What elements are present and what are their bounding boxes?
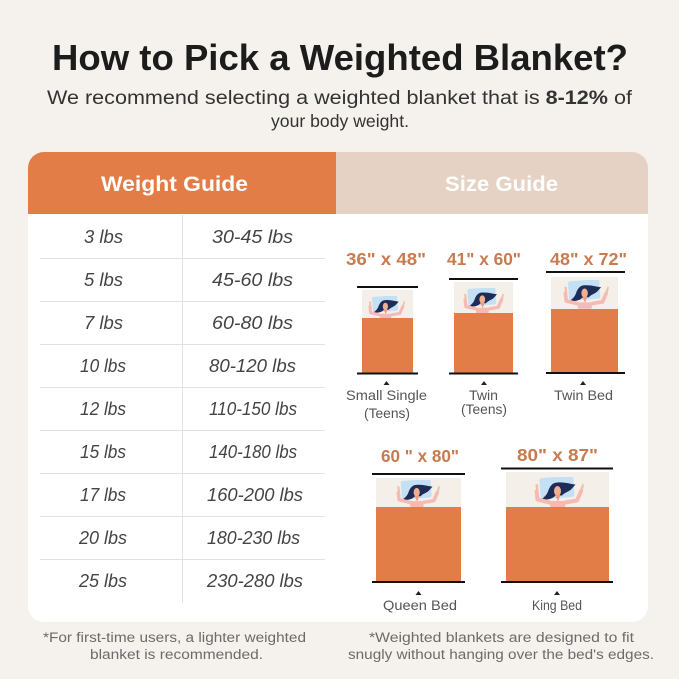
row: 7 lbs bbox=[84, 313, 293, 333]
row: 25 lbs: 230-280 lbs bbox=[206, 571, 303, 591]
panel: guide card bbox=[28, 152, 648, 622]
row: 20 lbs: 180-230 lbs bbox=[207, 528, 300, 548]
footnote: first-time users: *For first-time users, a lighter weighted bbox=[43, 630, 306, 645]
row: 15 lbs: 140-180 lbs bbox=[209, 442, 297, 462]
row: 17 lbs: 17 lbs bbox=[80, 485, 126, 505]
row: 7 lbs: 60-80 lbs bbox=[212, 313, 293, 333]
subtitle: We recommend selecting a weighted blanket that is 8-12% of bbox=[47, 88, 633, 109]
subtitle bbox=[47, 88, 633, 131]
row: 12 lbs: 12 lbs bbox=[80, 399, 126, 419]
size: twin teens: Twin bbox=[469, 387, 498, 403]
size: twin teens: (Teens) bbox=[461, 401, 507, 417]
size: small single: (Teens) bbox=[364, 405, 410, 421]
row: 10 lbs: 80-120 lbs bbox=[209, 356, 296, 376]
footnote: first-time users bbox=[43, 630, 306, 662]
size: twin teens: 41" x 60" bbox=[447, 249, 521, 269]
row: 3 lbs bbox=[84, 227, 293, 247]
row: 3 lbs: 30-45 lbs bbox=[212, 227, 293, 247]
row: 17 lbs: 160-200 lbs bbox=[207, 485, 303, 505]
row: 25 lbs bbox=[78, 571, 303, 591]
panel: size guide header: Size Guide bbox=[445, 173, 558, 196]
row: 20 lbs: 20 lbs bbox=[78, 528, 127, 548]
row: 5 lbs bbox=[84, 270, 293, 290]
weight table bbox=[40, 215, 325, 603]
size: king bed: King Bed bbox=[532, 597, 582, 613]
size: queen bed bbox=[372, 446, 465, 613]
panel: weight guide header: Weight Guide bbox=[101, 173, 248, 196]
footnote: first-time users: blanket is recommended. bbox=[90, 647, 263, 662]
row: 20 lbs bbox=[78, 528, 300, 548]
footnote: fit: *Weighted blankets are designed to fit bbox=[369, 630, 634, 645]
row: 5 lbs: 5 lbs bbox=[84, 270, 123, 290]
footnote: fit bbox=[348, 630, 654, 662]
panel: size guide header bbox=[336, 152, 648, 214]
row: 15 lbs bbox=[80, 442, 297, 462]
footnote: fit: snugly without hanging over the bed's edges. bbox=[348, 647, 654, 662]
row: 7 lbs: 7 lbs bbox=[84, 313, 123, 333]
size: queen bed: Queen Bed bbox=[383, 597, 457, 613]
subtitle: your body weight. bbox=[271, 111, 409, 131]
size: small single: Small Single bbox=[346, 387, 427, 403]
panel: weight guide header bbox=[28, 152, 336, 214]
row: 12 lbs: 110-150 lbs bbox=[209, 399, 297, 419]
row: 5 lbs: 45-60 lbs bbox=[212, 270, 293, 290]
size: twin teens bbox=[447, 249, 521, 417]
size: twin bed: Twin Bed bbox=[554, 387, 613, 403]
size: twin bed bbox=[546, 249, 627, 403]
row: 25 lbs: 25 lbs bbox=[78, 571, 127, 591]
row: 12 lbs bbox=[80, 399, 297, 419]
row: 15 lbs: 15 lbs bbox=[80, 442, 126, 462]
row: 3 lbs: 3 lbs bbox=[84, 227, 123, 247]
size: queen bed: 60 " x 80" bbox=[381, 446, 459, 466]
row: 10 lbs bbox=[80, 356, 296, 376]
size: king bed: 80" x 87" bbox=[517, 445, 598, 465]
title: How to Pick a Weighted Blanket? bbox=[52, 37, 628, 78]
size: twin bed: 48" x 72" bbox=[550, 249, 627, 269]
size: small single: 36" x 48" bbox=[346, 249, 426, 269]
size: king bed bbox=[501, 445, 613, 613]
size: small single bbox=[346, 249, 427, 421]
row: 10 lbs: 10 lbs bbox=[80, 356, 126, 376]
row: 17 lbs bbox=[80, 485, 303, 505]
